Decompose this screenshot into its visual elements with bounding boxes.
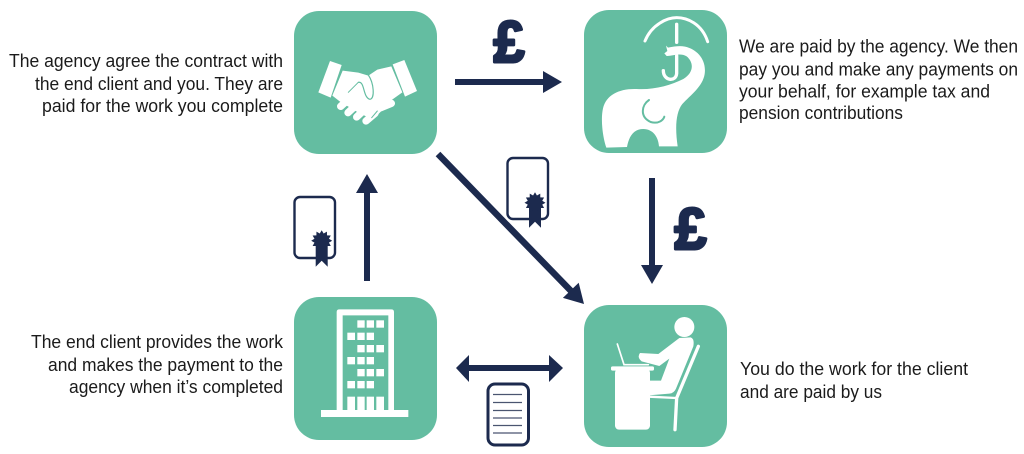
text: umbrella company description: pay you and make any payments on xyxy=(739,60,1018,80)
text: agency description: paid for the work you complete xyxy=(42,96,283,116)
text: agency description: the end client and you. They are xyxy=(35,74,283,94)
text: umbrella company description: your behalf, for example tax and xyxy=(739,82,990,102)
arrow: agency to umbrella xyxy=(455,71,562,93)
icon: contract certificate left xyxy=(294,197,335,267)
text: agency description: The agency agree the contract with xyxy=(9,51,283,71)
text: end client description xyxy=(31,332,284,397)
panel: end client building xyxy=(294,297,437,440)
text: umbrella company description xyxy=(739,36,1018,123)
panel: worker at desk xyxy=(584,305,727,447)
icon: pound sign right: £ xyxy=(674,197,706,262)
text: contractor description xyxy=(740,359,968,402)
icon: document xyxy=(488,384,528,445)
icon: elephant with umbrella xyxy=(602,18,708,148)
panel: agency handshake xyxy=(294,11,437,154)
arrow: umbrella to worker xyxy=(641,178,663,284)
text: umbrella company description: pension contributions xyxy=(739,103,903,123)
icon: handshake xyxy=(318,60,417,121)
text: contractor description: You do the work for the client xyxy=(740,359,968,379)
text: contractor description: and are paid by us xyxy=(740,382,882,402)
text: end client description: The end client provides the work xyxy=(31,332,284,352)
icon: contract certificate centre xyxy=(508,158,548,228)
arrow: agency to worker xyxy=(438,154,584,304)
icon: office building xyxy=(321,309,408,417)
text: end client description: agency when it’s completed xyxy=(69,377,283,397)
text: end client description: and makes the payment to the xyxy=(48,355,283,375)
arrow: client and worker two-way xyxy=(456,355,563,382)
icon: pound sign top: £ xyxy=(494,10,524,75)
text: umbrella company description: We are paid by the agency. We then xyxy=(739,36,1018,56)
icon: person at laptop xyxy=(611,317,698,430)
panel: umbrella elephant xyxy=(584,10,727,153)
text: agency description xyxy=(9,51,283,116)
arrow: client to agency xyxy=(356,174,378,281)
